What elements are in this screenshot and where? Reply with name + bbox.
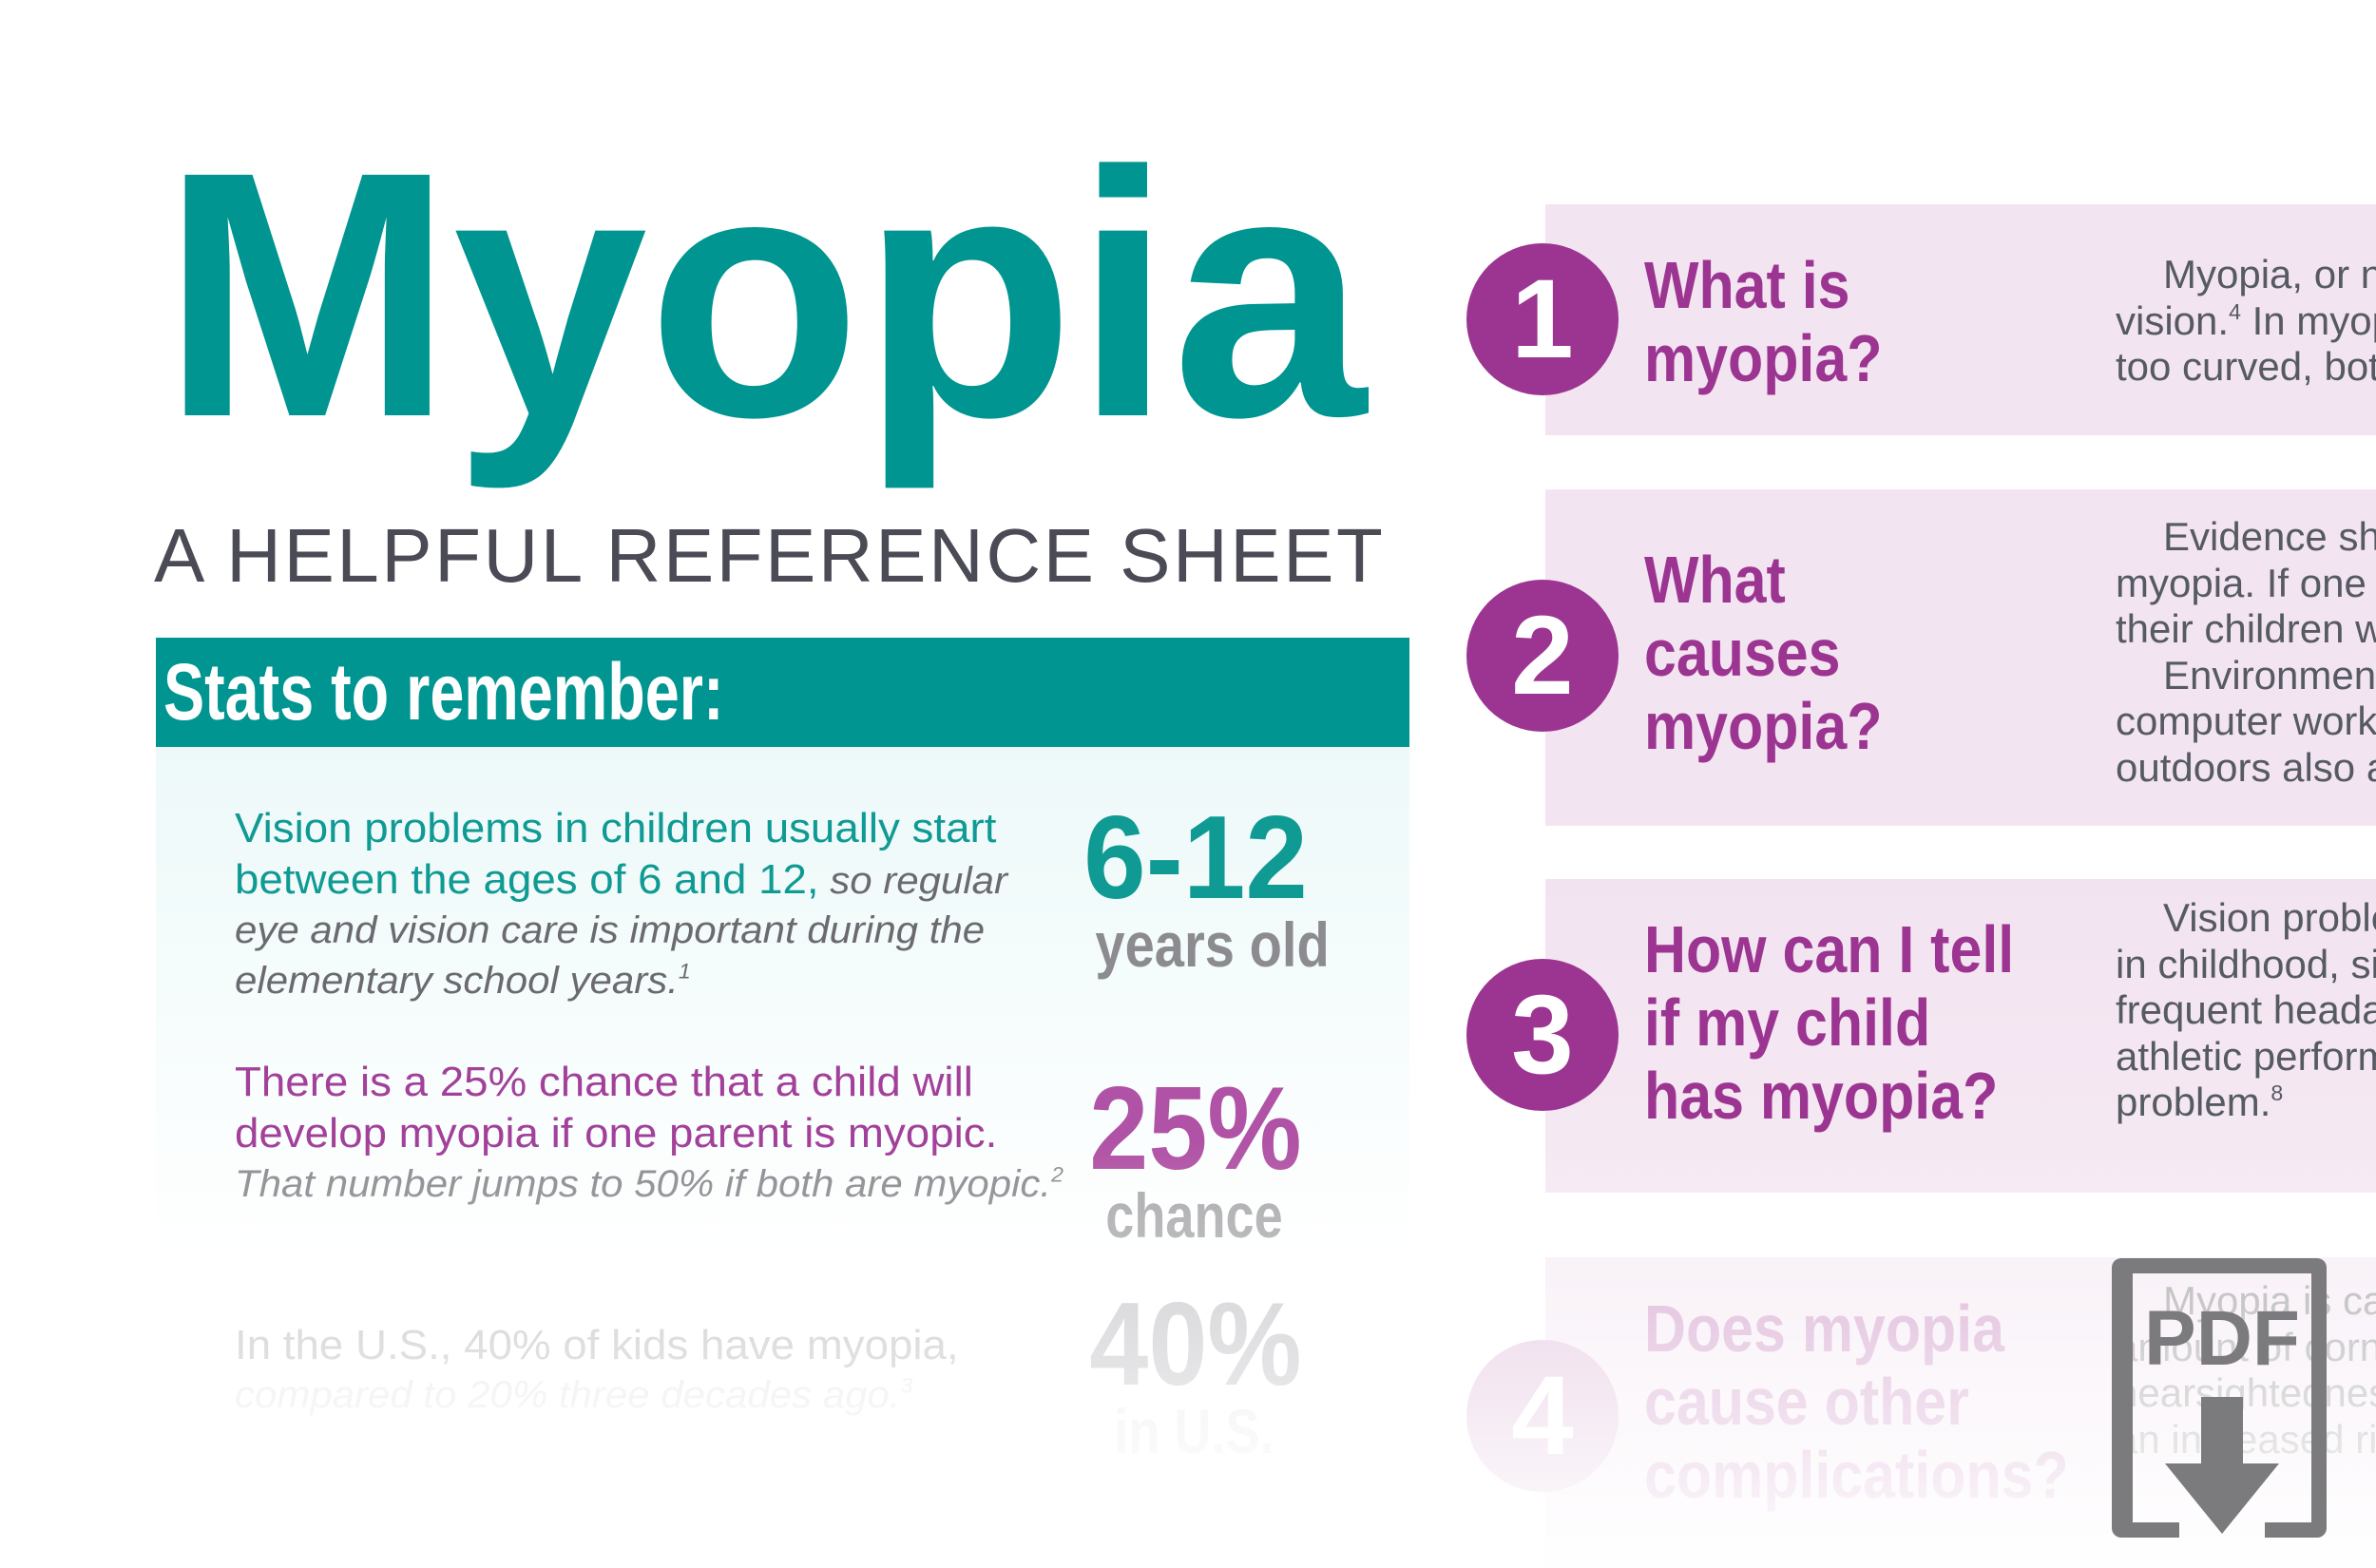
icon: number 2 — [1466, 580, 1619, 732]
stat 1 text — [235, 806, 1009, 1002]
body 2 — [2116, 514, 2376, 789]
stat 3 text: In the U.S., 40% of kids have myopia, — [235, 1323, 959, 1368]
body 1 — [2116, 252, 2376, 389]
title: Myopia — [162, 99, 1367, 489]
heading 2: What — [1644, 543, 1786, 617]
stat 2 number: 25% — [1089, 1063, 1302, 1195]
icon: number 4 — [1466, 1340, 1619, 1492]
stat 2 text: There is a 25% chance that a child will — [235, 1060, 973, 1105]
heading 3 — [1644, 912, 2014, 1133]
stat 2 number: chance — [1105, 1180, 1283, 1251]
stat 3 text: compared to 20% three decades ago.3 — [235, 1374, 912, 1416]
body 4 — [2116, 1278, 2376, 1462]
stat 2 text: develop myopia if one parent is myopic. — [235, 1110, 997, 1156]
icon: number 2: 2 — [1511, 593, 1574, 718]
stat 1 number: 6-12 — [1083, 793, 1308, 924]
heading 1 — [1644, 248, 1882, 395]
icon: number 3 — [1466, 959, 1619, 1111]
icon: PDF download: PDF — [2144, 1295, 2300, 1382]
heading 4: cause other — [1644, 1365, 1969, 1439]
heading 1: myopia? — [1644, 321, 1882, 395]
stat 1 text: between the ages of 6 and 12, so regular — [235, 857, 1007, 903]
heading 2: causes — [1644, 616, 1841, 690]
fade overlay — [0, 1140, 2376, 1568]
heading 2: myopia? — [1644, 689, 1882, 763]
stat 1 text: eye and vision care is important during the — [235, 909, 985, 951]
panel 3: how can I tell — [1545, 879, 2376, 1193]
heading bar: stats to remember — [156, 638, 1409, 747]
heading 1: What is — [1644, 248, 1850, 322]
panel 4: complications (faded) — [1545, 1257, 2376, 1568]
panel 2: what causes myopia — [1545, 489, 2376, 826]
stat 2 text: That number jumps to 50% if both are myopic.2 — [235, 1163, 1063, 1205]
icon: PDF download — [2112, 1258, 2327, 1538]
panel: stats — [156, 638, 1409, 1493]
panel 1: what is myopia — [1545, 204, 2376, 435]
subtitle: A HELPFUL REFERENCE SHEET — [154, 513, 1385, 598]
heading 4 — [1644, 1291, 2069, 1512]
stat 1 text: Vision problems in children usually start — [235, 806, 996, 851]
stat 3 number: in U.S. — [1114, 1396, 1274, 1466]
stat 1 number: years old — [1095, 909, 1330, 980]
body 3 — [2116, 895, 2376, 1124]
body 3: problem.8 — [2116, 1080, 2283, 1124]
stat 1 number — [1083, 793, 1330, 980]
heading 3: How can I tell — [1644, 912, 2014, 986]
stat 2 text — [235, 1060, 1063, 1205]
stat 1 text: elementary school years.1 — [235, 959, 691, 1002]
heading text: Stats to remember: — [163, 647, 723, 736]
heading 4: complications? — [1644, 1438, 2069, 1512]
icon: number 4: 4 — [1511, 1353, 1574, 1479]
heading 2 — [1644, 543, 1882, 763]
heading 3: has myopia? — [1644, 1059, 1998, 1133]
icon: number 3: 3 — [1511, 972, 1574, 1098]
heading 3: if my child — [1644, 985, 1930, 1060]
heading 4: Does myopia — [1644, 1291, 2004, 1366]
icon: number 1 — [1466, 243, 1619, 395]
icon: number 1: 1 — [1511, 257, 1574, 382]
stat 3 text — [235, 1323, 959, 1416]
stat 3 number: 40% — [1089, 1279, 1302, 1410]
